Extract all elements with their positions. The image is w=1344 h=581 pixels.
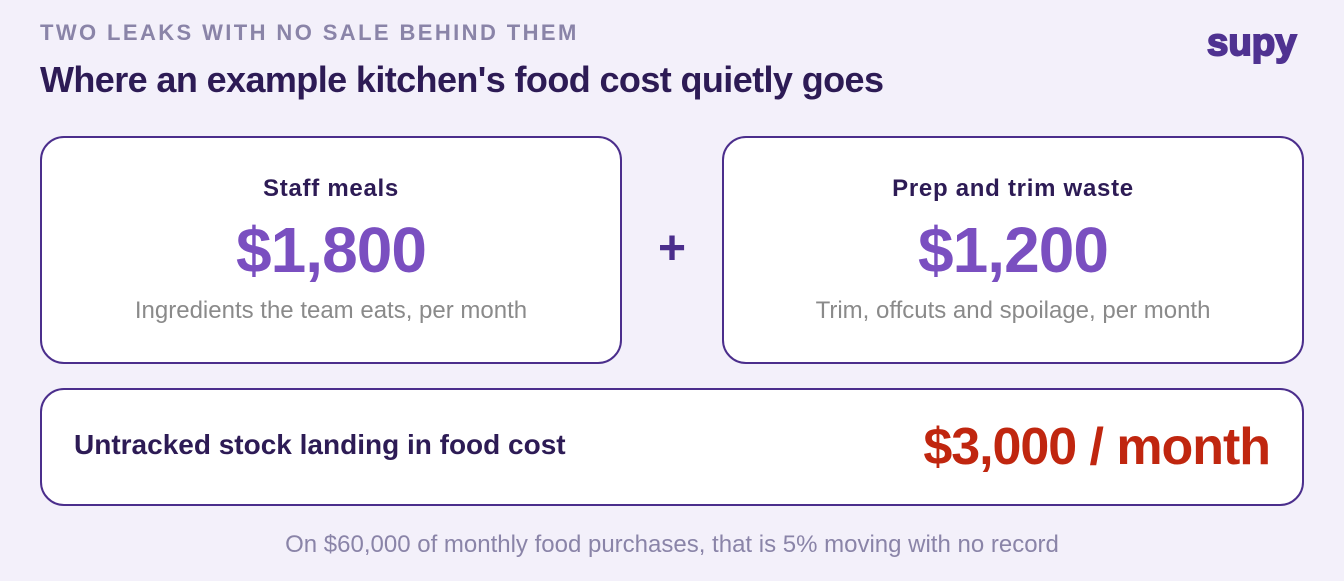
amount: prep and trim waste: $1,200 bbox=[918, 214, 1108, 286]
total amount: $3,000 / month bbox=[923, 418, 1270, 476]
panel: prep and trim waste bbox=[722, 136, 1304, 364]
panel: staff meals bbox=[40, 136, 622, 364]
total label: Untracked stock landing in food cost bbox=[74, 429, 566, 460]
eyebrow heading: TWO LEAKS WITH NO SALE BEHIND THEM bbox=[40, 20, 579, 45]
footnote: On $60,000 of monthly food purchases, that is 5% moving with no record bbox=[285, 531, 1059, 558]
description: staff meals: Ingredients the team eats, per month bbox=[135, 297, 527, 324]
panel heading: staff meals: Staff meals bbox=[263, 175, 399, 202]
description: prep and trim waste: Trim, offcuts and spoilage, per month bbox=[816, 297, 1210, 324]
panel heading: prep and trim waste: Prep and trim waste bbox=[892, 175, 1134, 202]
logo: supy: supy bbox=[1207, 21, 1297, 64]
amount: staff meals: $1,800 bbox=[236, 214, 426, 286]
plus sign: + bbox=[658, 222, 686, 275]
title: Where an example kitchen's food cost quietly goes bbox=[40, 59, 883, 100]
panel: total bbox=[40, 388, 1304, 506]
